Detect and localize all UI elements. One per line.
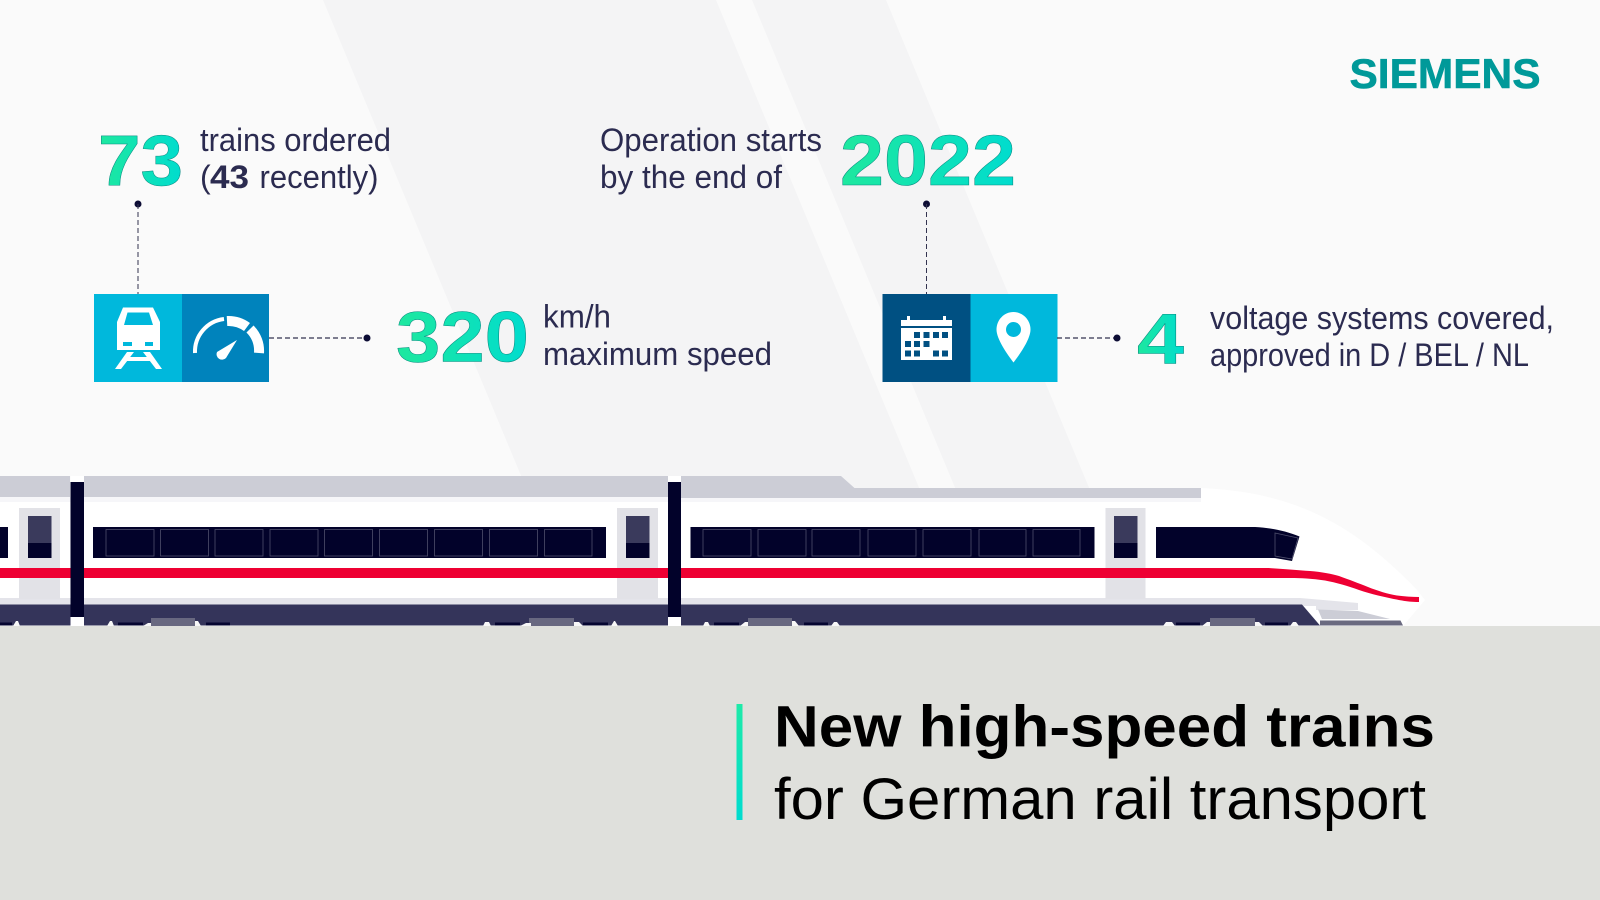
undercarriage: [0, 604, 1403, 626]
icon box: calendar and pin: [882, 294, 1058, 382]
train windows: [0, 527, 1300, 561]
bogies: [0, 618, 1299, 626]
label 43 recently: recently): [260, 159, 378, 195]
number 2022: 2022: [840, 122, 1016, 201]
icon box: train and speedometer: [94, 294, 269, 382]
stat: 73 trains ordered: [98, 122, 391, 201]
label maximum speed: maximum speed: [543, 336, 772, 372]
number 73: 73: [98, 122, 183, 201]
train body: [0, 488, 1425, 626]
number 4: 4: [1137, 300, 1185, 380]
subheadline: for German rail transport: [774, 767, 1426, 832]
label 43 recently: (: [200, 159, 211, 195]
icon: speedometer: [195, 319, 259, 360]
carriage connectors: [70, 476, 681, 626]
label approved in D / BEL / NL: approved in D / BEL / NL: [1210, 337, 1529, 373]
label by the end of: by the end of: [600, 159, 782, 195]
label operation starts: Operation starts: [600, 122, 822, 158]
logo: SIEMENS: SIEMENS: [1350, 50, 1540, 97]
ground panel: [0, 626, 1600, 900]
icon: train: [115, 308, 162, 369]
red stripe: [0, 568, 1419, 602]
label trains ordered: trains ordered: [200, 122, 391, 158]
title: [774, 694, 1435, 832]
headline: New high-speed trains: [774, 694, 1435, 760]
train: [0, 476, 1425, 626]
icon: calendar: [901, 316, 952, 360]
number 320: 320: [396, 298, 529, 378]
connector: 73 to icons: [134, 200, 142, 294]
connector: icons to 320: [269, 334, 370, 342]
connector: 2022 to icons: [923, 200, 930, 294]
stat: operation starts 2022: [600, 122, 1016, 201]
icon: map pin: [996, 312, 1030, 362]
stat: 4 voltage systems: [1137, 300, 1554, 380]
stat: 320 km/h: [396, 298, 772, 378]
label voltage systems covered: voltage systems covered,: [1210, 300, 1554, 336]
title accent bar: [736, 704, 742, 820]
label 43 recently: 43: [210, 159, 249, 195]
train doors: [19, 508, 1146, 599]
train roof: [0, 476, 1201, 498]
connector: icons to 4: [1057, 334, 1120, 342]
label km/h: km/h: [543, 298, 611, 334]
